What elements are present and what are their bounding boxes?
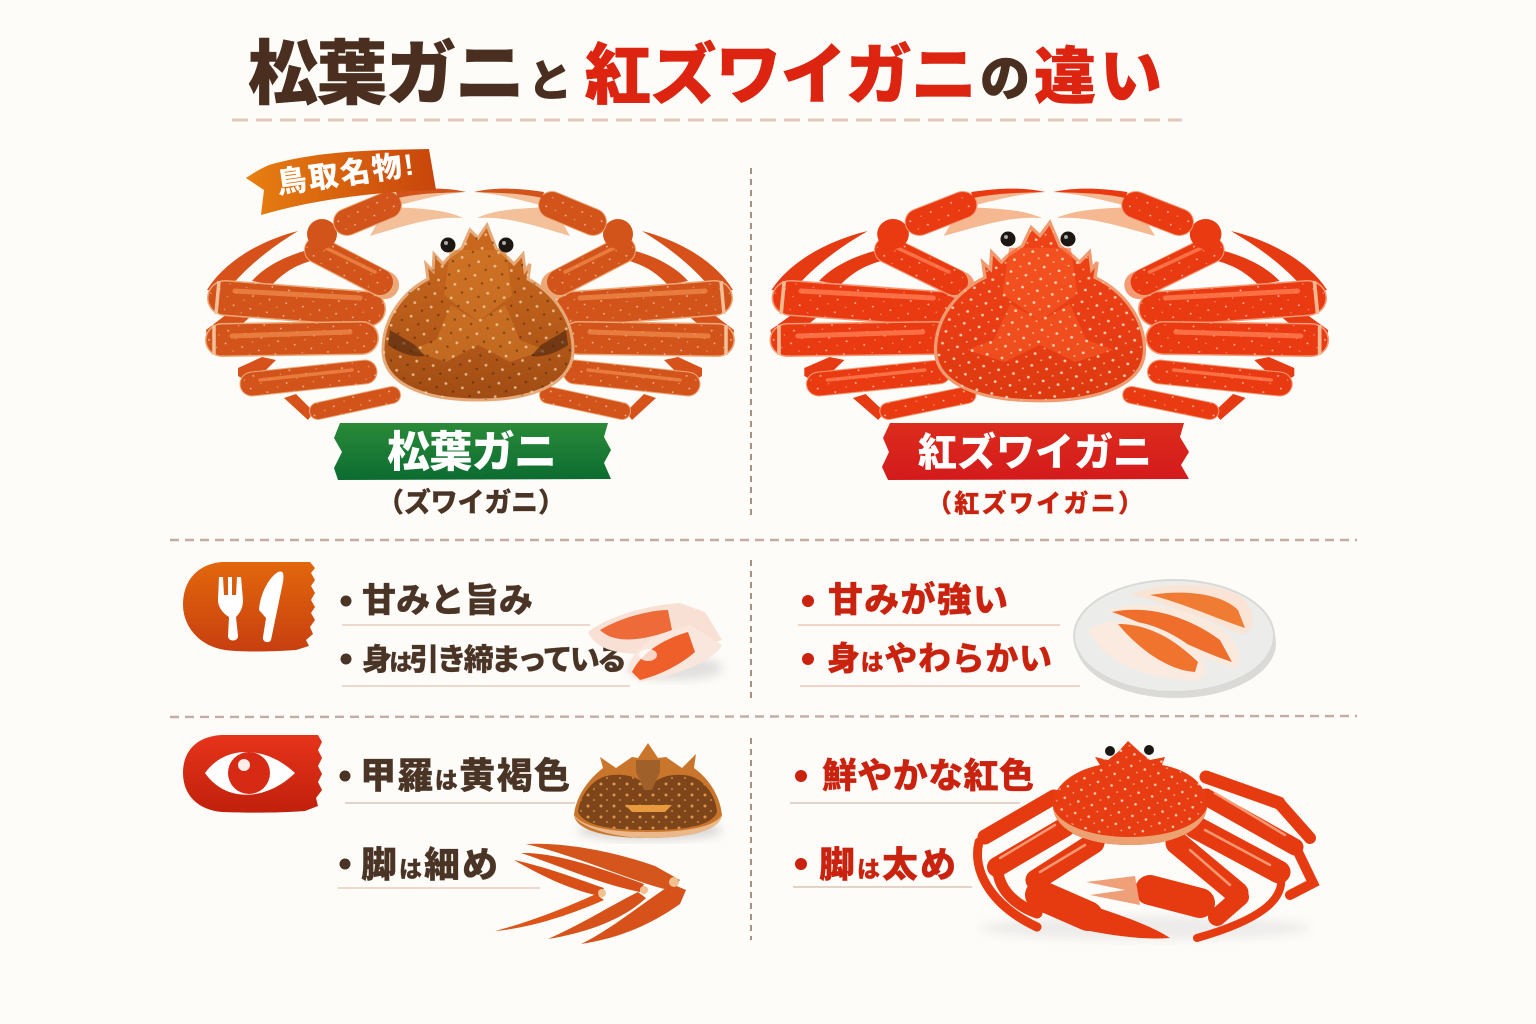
food texture: matsuba: 甘みと旨み — [362, 582, 533, 620]
illustration: red crab side view — [978, 741, 1313, 940]
badge: tottori specialty: 鳥取名物! — [275, 149, 416, 200]
label: matsuba crab — [334, 423, 611, 480]
icon: fork and knife — [183, 562, 315, 652]
illustration: red snow crab — [771, 189, 1328, 420]
appearance: red snow crab: 脚は太め — [819, 844, 956, 885]
food texture: red snow crab — [798, 580, 1080, 686]
appearance: matsuba: 脚は細め — [361, 844, 498, 885]
illustration: matsuba shell — [574, 743, 722, 840]
illustration: matsuba legs — [495, 844, 686, 944]
appearance: red snow crab — [790, 757, 1034, 887]
appearance: matsuba: 甲羅は黄褐色 — [360, 755, 570, 796]
appearance: red snow crab: 鮮やかな紅色 — [822, 757, 1034, 796]
title — [248, 35, 1162, 113]
title: と — [528, 57, 572, 106]
food texture: red snow crab: 甘みが強い — [828, 580, 1008, 620]
appearance: matsuba — [338, 755, 575, 888]
badge: tottori specialty — [246, 149, 436, 215]
label: matsuba crab: 松葉ガニ — [387, 429, 557, 477]
food texture: red snow crab: 身はやわらかい — [827, 640, 1052, 677]
subtitle: snow crab: （ズワイガニ） — [377, 487, 565, 518]
title: 松葉ガニ — [248, 35, 525, 113]
food texture: matsuba — [340, 582, 630, 686]
title: 紅ズワイガニ — [585, 38, 977, 112]
label: red snow crab — [882, 423, 1189, 480]
illustration: plate of red crab meat — [1074, 580, 1276, 698]
subtitle: red snow crab: （紅ズワイガニ） — [927, 489, 1143, 518]
title: の — [980, 51, 1030, 107]
food texture: matsuba: 身は引き締まっている — [362, 644, 627, 677]
label: red snow crab: 紅ズワイガニ — [918, 431, 1152, 475]
icon: eye — [183, 735, 322, 813]
illustration: matsuba crab — [206, 189, 734, 420]
title: 違い — [1034, 43, 1162, 112]
illustration: matsuba crab meat — [588, 603, 723, 682]
